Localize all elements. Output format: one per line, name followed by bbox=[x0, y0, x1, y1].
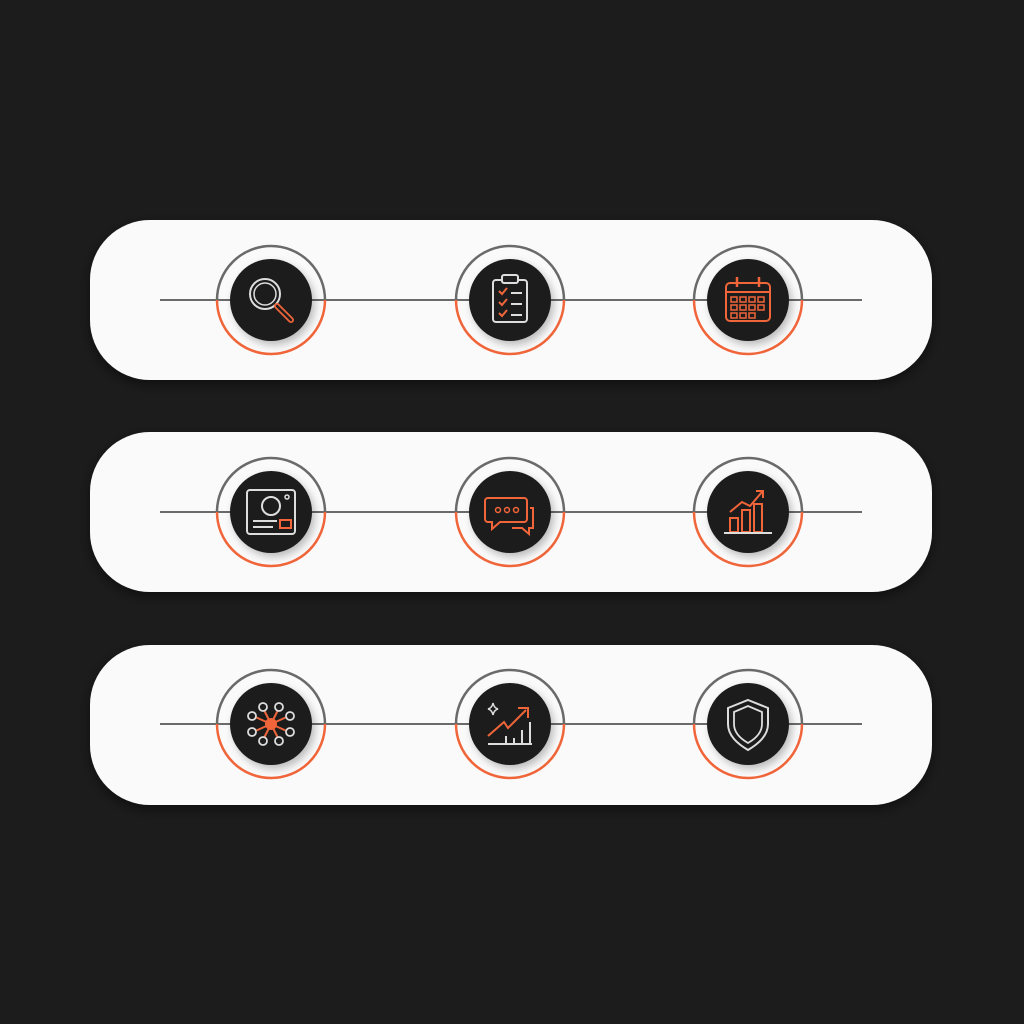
icon: bar chart growth bbox=[694, 458, 802, 566]
panel: row 2 bbox=[90, 432, 932, 592]
panel: row 3 bbox=[90, 645, 932, 805]
icon: camera card bbox=[217, 458, 325, 566]
icon: magnifier bbox=[217, 246, 325, 354]
icon: shield bbox=[694, 670, 802, 778]
panel: row 1 bbox=[90, 220, 932, 380]
icon: chat bbox=[456, 458, 564, 566]
icon: clipboard checklist bbox=[456, 246, 564, 354]
icon: network bbox=[217, 670, 325, 778]
icon: calendar bbox=[694, 246, 802, 354]
icon: trend arrow sparkle bbox=[456, 670, 564, 778]
